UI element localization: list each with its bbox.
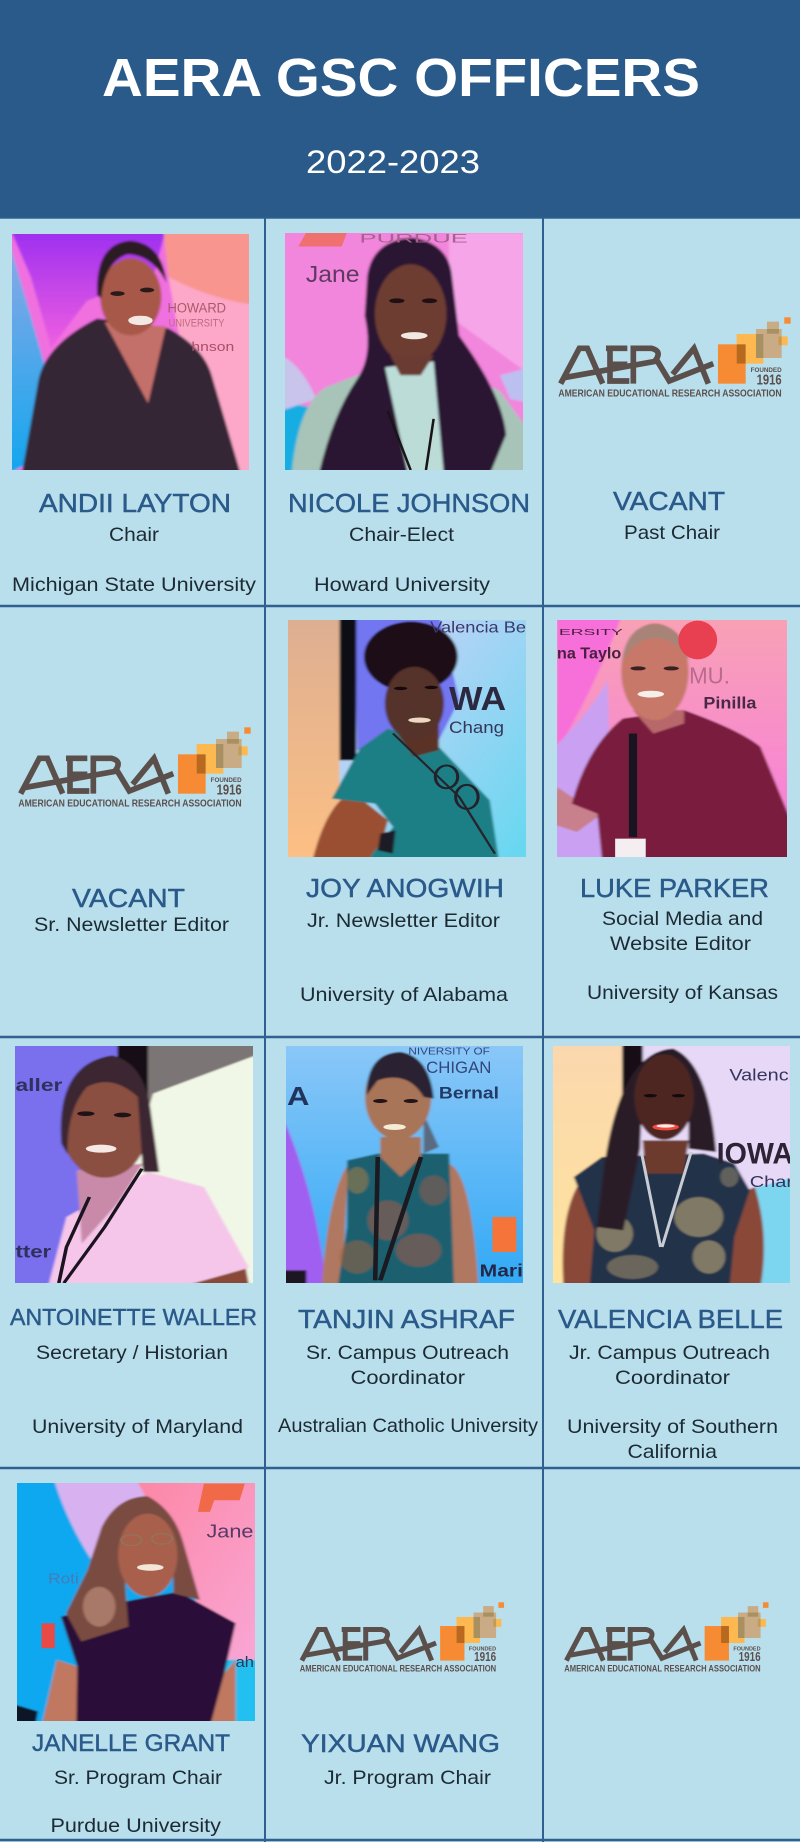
role second line: Website Editor (610, 933, 752, 955)
photo: Nicole Johnson: Jane (306, 261, 360, 287)
logo: AERA: FOUNDED (733, 1646, 761, 1652)
logo: AERA (300, 1602, 504, 1674)
logo: AERA: FOUNDED (751, 367, 782, 374)
photo: Janelle Grant: ah (236, 1655, 254, 1671)
name: YIXUAN WANG (301, 1730, 500, 1758)
university: University of Kansas (587, 982, 778, 1004)
photo: Andii Layton: UNIVERSITY (168, 316, 225, 329)
panel: Janelle Grant (10, 1477, 265, 1837)
panel: Valencia Belle (546, 1040, 796, 1463)
photo: Nicole Johnson (285, 232, 523, 470)
role: Chair (109, 524, 160, 546)
photo: Tanjin Ashraf: A (287, 1083, 309, 1111)
logo: AERA: AMERICAN EDUCATIONAL RESEARCH ASSOCIATION (18, 798, 242, 809)
panel: Yixuan Wang (300, 1602, 504, 1789)
name: VALENCIA BELLE (558, 1304, 783, 1334)
panel: Vacant Sr. Newsletter Editor (18, 727, 251, 936)
logo: AERA: FOUNDED (469, 1646, 496, 1652)
name: NICOLE JOHNSON (288, 488, 530, 518)
logo: AERA: AMERICAN EDUCATIONAL RESEARCH ASSOCIATION (300, 1664, 496, 1674)
role: Past Chair (624, 522, 721, 544)
university: Purdue University (50, 1815, 221, 1837)
logo: AERA: 1916 (474, 1649, 496, 1664)
name: ANTOINETTE WALLER (10, 1304, 257, 1330)
photo: Antoinette Waller: tter (16, 1242, 51, 1262)
name: JANELLE GRANT (32, 1730, 230, 1757)
name: VACANT (72, 883, 185, 913)
logo: AERA (564, 1602, 769, 1674)
photo: Luke Parker (557, 620, 787, 857)
name: VACANT (613, 486, 725, 516)
photo: Antoinette Waller (15, 1046, 253, 1283)
university second line: California (628, 1441, 717, 1463)
photo: Nicole Johnson: PURDUE (360, 232, 468, 245)
logo: AERA (18, 727, 251, 809)
role: Jr. Campus Outreach (569, 1342, 770, 1364)
role second line: Coordinator (350, 1367, 466, 1389)
photo: Joy Anogwih: Chang (449, 718, 504, 737)
name: ANDII LAYTON (39, 488, 231, 518)
photo: Tanjin Ashraf: Bernal (439, 1084, 499, 1102)
photo: Janelle Grant (17, 1483, 255, 1721)
name: LUKE PARKER (580, 873, 769, 903)
role: Secretary / Historian (36, 1342, 228, 1364)
panel: Antoinette Waller (8, 1040, 260, 1438)
role: Sr. Program Chair (54, 1767, 223, 1789)
photo: Tanjin Ashraf: Mari (480, 1261, 523, 1280)
photo: Luke Parker: Pinilla (703, 694, 757, 712)
role: Sr. Campus Outreach (306, 1342, 509, 1364)
role: Social Media and (602, 908, 763, 930)
name: JOY ANOGWIH (306, 873, 504, 903)
logo: AERA (558, 317, 791, 399)
photo: Tanjin Ashraf (286, 1045, 523, 1283)
photo: Joy Anogwih: WA (449, 681, 506, 718)
photo: Janelle Grant: Roti (48, 1571, 79, 1587)
title: AERA GSC OFFICERS (102, 48, 700, 108)
university: Australian Catholic University (278, 1415, 538, 1437)
photo: Andii Layton: hnson (191, 341, 234, 355)
panel: Andii Layton (0, 198, 306, 596)
photo: Andii Layton (12, 234, 249, 470)
header banner (0, 0, 800, 218)
panel: Joy Anogwih (281, 613, 533, 1006)
panel: Tanjin Ashraf (278, 1040, 538, 1437)
photo: Joy Anogwih (288, 619, 526, 857)
photo: Luke Parker: ERSITY (559, 628, 624, 637)
logo: AERA: AMERICAN EDUCATIONAL RESEARCH ASSOCIATION (564, 1664, 761, 1674)
logo: AERA: FOUNDED (211, 777, 242, 784)
name: TANJIN ASHRAF (298, 1304, 515, 1334)
panel: Luke Parker (551, 613, 796, 1004)
panel: Vacant Past Chair (558, 317, 791, 544)
role: Chair-Elect (349, 524, 455, 546)
photo: Tanjin Ashraf: NIVERSITY OF (408, 1045, 490, 1057)
photo: Valencia Belle (553, 1046, 793, 1283)
photo: Andii Layton: HOWARD (167, 300, 226, 316)
photo: Luke Parker: MU. (689, 663, 730, 689)
logo: AERA: 1916 (217, 782, 242, 798)
subtitle: years: 2022-2023 (306, 144, 480, 180)
role: Sr. Newsletter Editor (34, 914, 230, 936)
role second line: Coordinator (615, 1367, 731, 1389)
role: Jr. Program Chair (324, 1767, 492, 1789)
university: University of Alabama (300, 984, 508, 1006)
panel: empty with logo (564, 1602, 769, 1674)
panel: Nicole Johnson (255, 197, 561, 596)
university: Howard University (314, 574, 490, 596)
photo: Luke Parker: na Taylo (557, 645, 621, 663)
photo: Tanjin Ashraf: CHIGAN (426, 1058, 491, 1077)
university: University of Southern (567, 1416, 778, 1438)
logo: AERA: 1916 (739, 1649, 761, 1664)
photo: Antoinette Waller: aller (16, 1076, 63, 1095)
role: Jr. Newsletter Editor (307, 910, 501, 932)
logo: AERA: 1916 (757, 372, 782, 388)
university: University of Maryland (32, 1416, 243, 1438)
university: Michigan State University (12, 574, 256, 596)
